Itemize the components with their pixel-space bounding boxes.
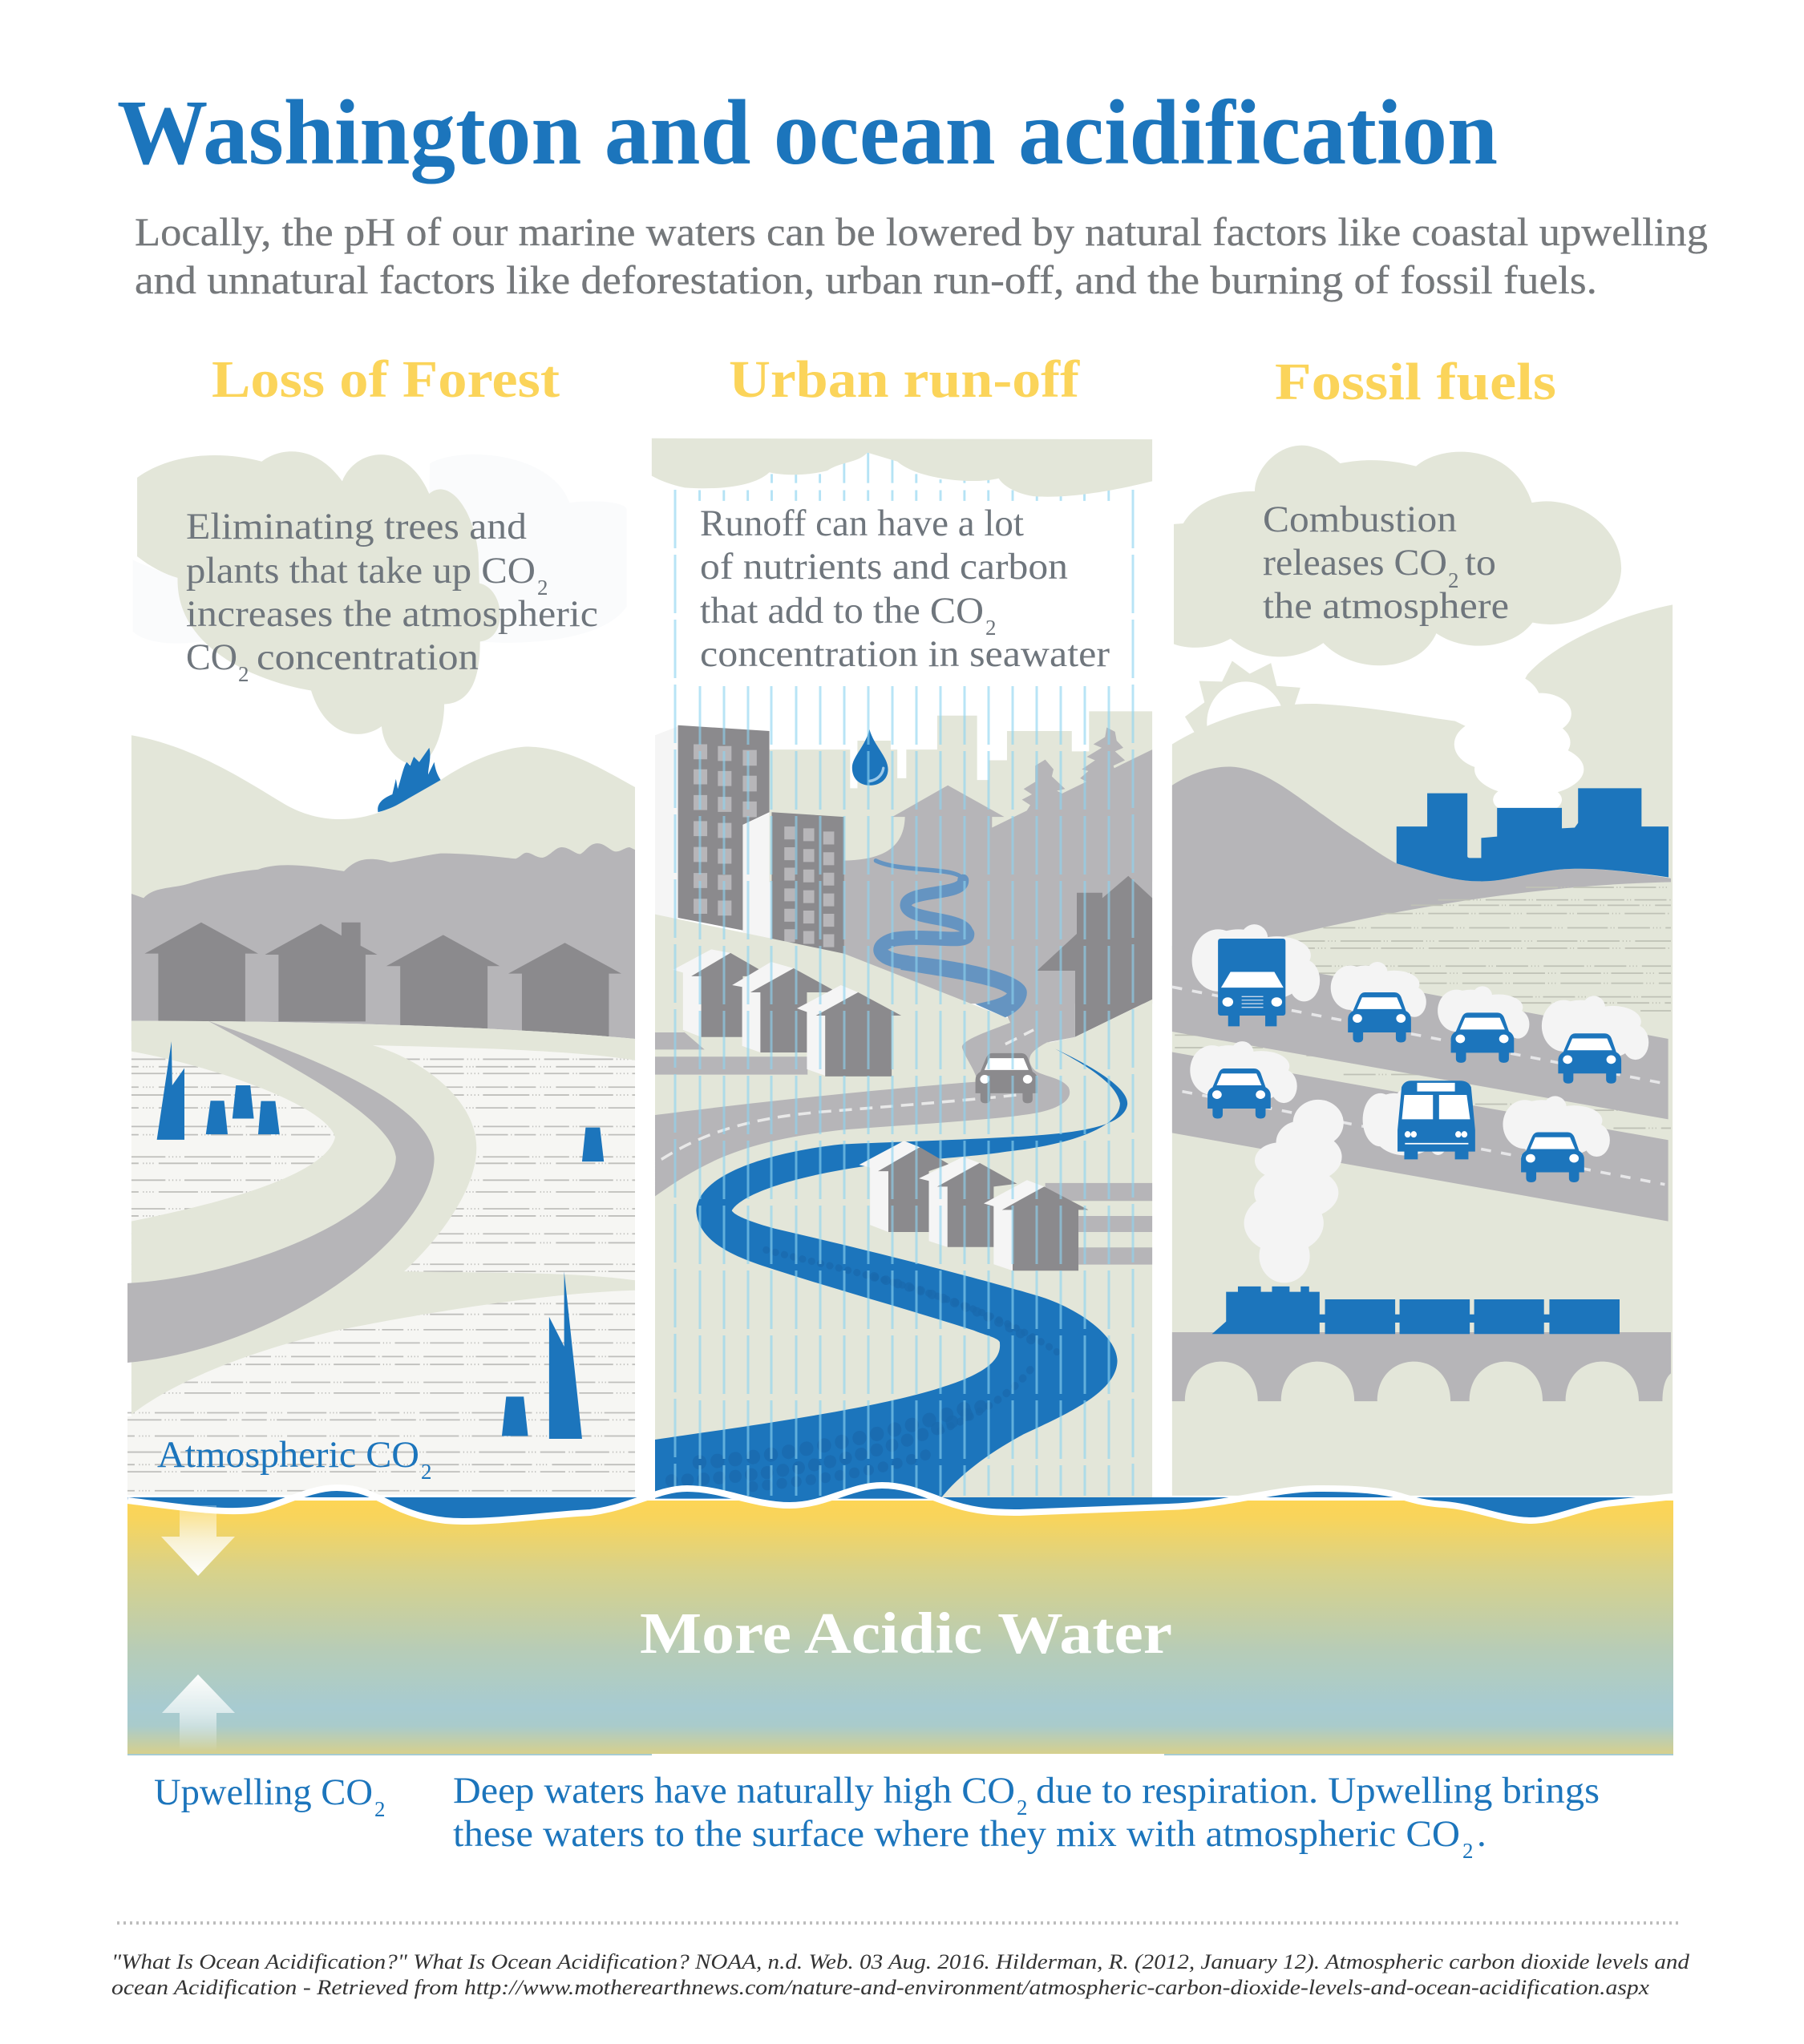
- houses upper row: [673, 949, 901, 1077]
- river sediment: [671, 1250, 1057, 1488]
- water surface: [127, 1485, 1673, 1521]
- text: deep waters: [453, 1770, 1600, 1863]
- rain cloud: [652, 438, 1152, 497]
- text: urban run-off: concentration in seawater: [700, 633, 1110, 675]
- train: [1212, 1287, 1620, 1334]
- apartment building right: [771, 812, 844, 957]
- grey hillside with house: [844, 749, 1152, 1004]
- text: urban run-off: Runoff can have a lot: [700, 503, 1024, 544]
- text: deep waters: these waters to the surface where they mix with atmospheric CO: [453, 1813, 1460, 1855]
- arrow: atmospheric CO2 down: [161, 1505, 235, 1576]
- title: Washington and ocean acidification: [117, 82, 1498, 184]
- road centre dashes: [661, 1030, 1033, 1159]
- field lines: [1175, 887, 1671, 1128]
- road dashes: [1172, 987, 1668, 1185]
- icon: sun: [1185, 660, 1300, 764]
- text: loss of forest: CO: [186, 636, 237, 678]
- trees: [1022, 727, 1125, 816]
- text: fossil fuels: to: [1465, 542, 1496, 584]
- text: urban run-off: [700, 503, 1110, 675]
- hills: [1172, 604, 1673, 1496]
- text: urban run-off: 2: [985, 616, 996, 640]
- icon: cars: [1207, 992, 1621, 1182]
- text: deep waters: .: [1477, 1813, 1486, 1855]
- distant ridge: [131, 843, 635, 1041]
- left pale block: [655, 726, 771, 943]
- factory: [1397, 788, 1668, 881]
- icon: water drop: [852, 729, 888, 786]
- factory smoke: [1454, 673, 1584, 816]
- rain stubs under cloud: [700, 453, 1109, 501]
- tree stumps: [157, 1041, 604, 1439]
- icon: truck: [1218, 939, 1285, 1026]
- field: [1256, 882, 1671, 1041]
- grey hillside: [1172, 766, 1671, 964]
- ground: [655, 915, 1152, 1499]
- label: upwelling CO2: 2: [374, 1797, 385, 1821]
- arrow: upwelling CO2 up: [162, 1674, 235, 1751]
- roads: [1172, 946, 1668, 1222]
- text: deep waters: Deep waters have naturally high CO: [453, 1770, 1015, 1812]
- text: loss of forest: concentration: [257, 636, 479, 678]
- references: ocean Acidification - Retrieved from http://www.motherearthnews.com/nature-and-environment/atmospheric-carbon-dioxide-levels-and-ocean-acidification.aspx: [111, 1976, 1650, 1999]
- text: loss of forest: plants that take up CO: [186, 550, 536, 592]
- text: fossil fuels: 2: [1448, 568, 1459, 592]
- panel: urban run-off: [652, 438, 1152, 1499]
- text: urban run-off: of nutrients and carbon: [700, 546, 1068, 588]
- heading: fossil fuels: Fossil fuels: [1275, 353, 1556, 411]
- smoke cloud: [137, 451, 500, 765]
- apartment building left: [678, 725, 770, 931]
- text: deep waters: 2: [1017, 1796, 1028, 1820]
- icon: bus: [1397, 1081, 1475, 1159]
- houses: [144, 923, 621, 1038]
- label: atmospheric CO2: Atmospheric CO: [157, 1434, 419, 1476]
- text: fossil fuels: the atmosphere: [1263, 585, 1509, 627]
- hillside house: [1037, 876, 1152, 1037]
- hill: [131, 735, 635, 954]
- intro text: and unnatural factors like deforestation, urban run-off, and the burning of fossil fuels.: [135, 257, 1597, 302]
- panel: fossil fuels: [1172, 446, 1673, 1496]
- panel: loss of forest: [127, 451, 635, 1495]
- text: fossil fuels: [1263, 499, 1509, 627]
- text: fossil fuels: releases CO: [1263, 542, 1447, 584]
- skyline: [770, 711, 1152, 882]
- text: deep waters: 2: [1462, 1839, 1474, 1863]
- references: "What Is Ocean Acidification?" What Is Ocean Acidification? NOAA, n.d. Web. 03 Aug. 2016. Hilderman, R. (2012, January 12). Atmospheric carbon dioxide levels and: [111, 1950, 1690, 1973]
- intro text: [135, 209, 1708, 302]
- text: loss of forest: 2: [238, 662, 249, 686]
- road verge: [131, 1021, 635, 1415]
- text: loss of forest: increases the atmospheric: [186, 593, 598, 635]
- exhaust clouds: [1190, 924, 1648, 1157]
- text: fossil fuels: Combustion: [1263, 499, 1457, 540]
- rain: [675, 490, 1133, 1496]
- label: atmospheric CO2: 2: [421, 1460, 431, 1484]
- houses lower row: [859, 1141, 1089, 1270]
- stream: [876, 861, 1027, 1017]
- bridge: [1172, 1332, 1671, 1401]
- faint background smoke: [133, 454, 627, 644]
- dotted divider: [117, 1921, 1680, 1925]
- text: loss of forest: [186, 506, 598, 686]
- stubble lines: [127, 1059, 635, 1491]
- ocean gradient band: [127, 1501, 1673, 1755]
- label: more acidic water: More Acidic Water: [640, 1601, 1172, 1666]
- cleared ground: [127, 1021, 635, 1495]
- label: upwelling CO2: Upwelling CO: [154, 1771, 373, 1813]
- side streets: [655, 1032, 1152, 1265]
- text: urban run-off: that add to the CO: [700, 590, 984, 632]
- wave line: [127, 1485, 1673, 1521]
- river: [655, 1048, 1127, 1499]
- icon: car: [976, 1053, 1038, 1103]
- train smoke: [1244, 1100, 1344, 1283]
- text: loss of forest: 2: [537, 576, 548, 600]
- hillside road: [655, 971, 1075, 1196]
- references: [111, 1950, 1690, 1999]
- text: loss of forest: Eliminating trees and: [186, 506, 527, 547]
- heading: urban run-off: Urban run-off: [729, 350, 1080, 409]
- road: [127, 1021, 435, 1363]
- cloud: [1174, 446, 1621, 665]
- intro text: Locally, the pH of our marine waters can be lowered by natural factors like coastal upwelling: [135, 209, 1708, 254]
- heading: loss of forest: Loss of Forest: [212, 350, 560, 409]
- text: deep waters: due to respiration. Upwelling brings: [1036, 1770, 1600, 1812]
- icon: forest fire: [378, 748, 441, 812]
